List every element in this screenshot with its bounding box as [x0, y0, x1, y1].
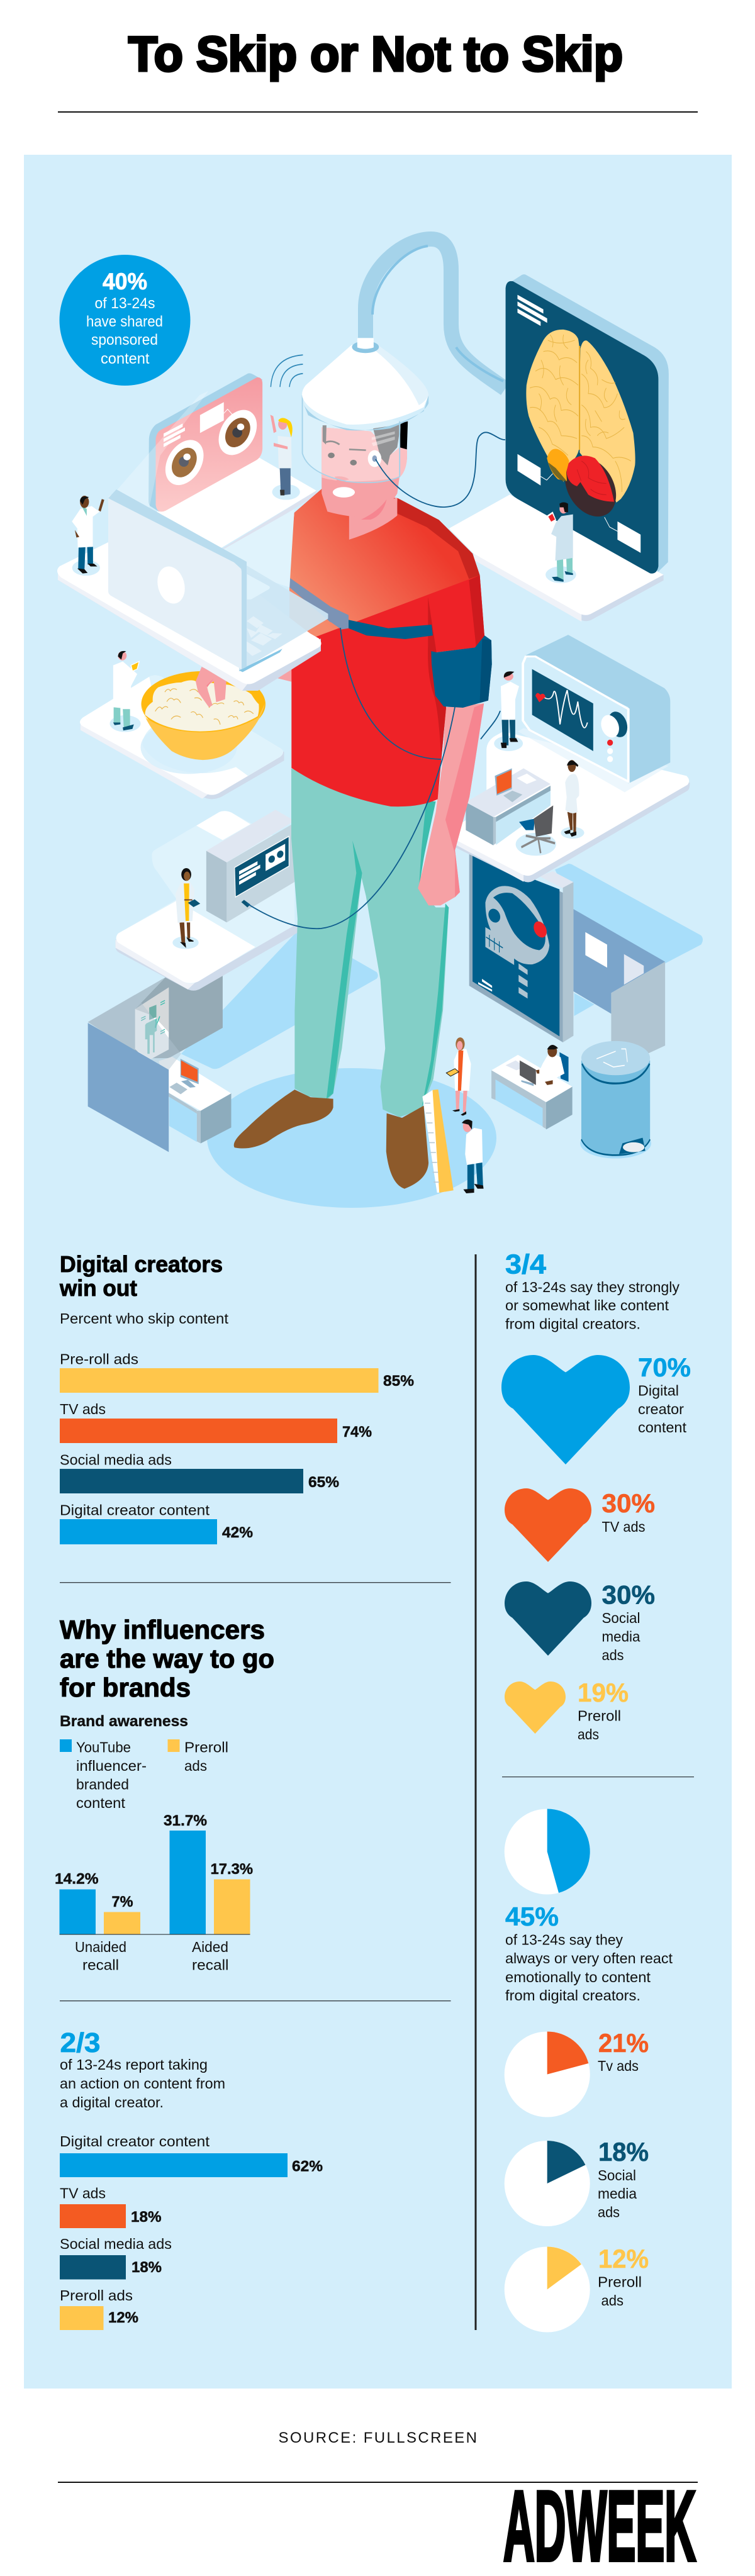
illustration: back room wall and partition [573, 909, 665, 1056]
signal waves [271, 355, 303, 387]
bar: digital creator content: Digital creator content [60, 2133, 210, 2149]
brain [526, 330, 635, 529]
stat: two thirds took action: a digital creator. [60, 2094, 164, 2110]
heading: Digital creators [60, 1251, 223, 1277]
pie chart: 45 percent react emotionally: of 13-24s say they [505, 1931, 623, 1948]
illustration: platform with scanner machine [116, 810, 298, 991]
legend: youtube and preroll: YouTube [76, 1739, 131, 1755]
callout: 40 percent shared sponsored content: 40% [103, 269, 147, 294]
illustration: man's head and face [302, 338, 428, 540]
pie chart: preroll ads 12 percent: ads [601, 2292, 624, 2309]
heart chart: tv ads 30 percent: TV ads [601, 1519, 646, 1535]
heart chart: digital creator content 70 percent [501, 1352, 691, 1464]
bar: digital creator content: 42% [222, 1524, 253, 1541]
illustration: brain scan screen [449, 274, 669, 622]
bar: social media ads: Social media ads [60, 2236, 172, 2252]
heading: why influencers [60, 1615, 274, 1702]
illustration: desk with seated doctor [491, 1045, 573, 1130]
bar: social media ads [60, 1452, 339, 1493]
illustration: floor shapes [181, 864, 703, 1208]
helmet glass visor [303, 395, 400, 482]
bar: tv ads: TV ads [60, 1401, 106, 1417]
pie chart: 45 percent react emotionally: from digital creators. [505, 1987, 640, 2004]
bar: preroll ads: Preroll ads [60, 2287, 133, 2304]
doctor: blonde woman waving [271, 415, 300, 500]
pie chart: tv ads 21 percent [505, 2028, 649, 2117]
stat: three quarters like creator content: or somewhat like content [505, 1297, 669, 1313]
illustration: heart monitor machine [494, 635, 670, 783]
chart: actions taken [60, 2133, 323, 2330]
doctor: woman by the chair [561, 760, 584, 839]
office chair [516, 805, 556, 856]
illustration: right platform with desk [450, 728, 690, 883]
glowing area beside chest [222, 509, 294, 588]
left shoe [234, 1090, 333, 1149]
chart: brand recall grouped bars: 17.3% [210, 1861, 253, 1878]
callout: 40 percent shared sponsored content [59, 255, 190, 386]
pie chart: tv ads 21 percent: Tv ads [598, 2058, 639, 2074]
chart: brand recall grouped bars: recall [192, 1956, 229, 1973]
heart chart: social media ads 30 percent: 30% [601, 1580, 655, 1609]
legend: youtube and preroll: branded [76, 1776, 129, 1793]
title: To Skip or Not to Skip [128, 26, 623, 82]
bar: pre-roll ads: Pre-roll ads [60, 1351, 138, 1368]
bar: digital creator content: Digital creator content [60, 1502, 210, 1519]
pie chart: tv ads 21 percent: 21% [598, 2028, 649, 2058]
legend: youtube and preroll [60, 1739, 228, 1811]
illustration: man's arm and hand [418, 703, 484, 905]
bar: social media ads: 65% [308, 1474, 339, 1491]
heading [59, 1251, 223, 1301]
bar: social media ads: Social media ads [60, 1452, 172, 1468]
x-ray figure on door [141, 1000, 165, 1054]
illustration: left room with desk [88, 976, 231, 1152]
heart chart: digital creator content 70 percent: content [638, 1419, 687, 1436]
illustration: bowl platform [80, 651, 284, 799]
callout: 40 percent shared sponsored content: sponsored [91, 332, 158, 348]
stat: three quarters like creator content [505, 1249, 680, 1332]
pie chart: preroll ads 12 percent [505, 2244, 649, 2333]
doctor: man with clipboard [109, 651, 140, 732]
pie chart: 45 percent react emotionally: emotionally to content [505, 1969, 651, 1985]
doctor: woman with tablet [172, 868, 200, 949]
heart chart: preroll ads 19 percent [505, 1678, 629, 1742]
bar: digital creator content: 62% [292, 2158, 323, 2175]
subheading: brand awareness: Brand awareness [60, 1713, 188, 1730]
pie chart: 45 percent react emotionally [505, 1809, 673, 2004]
heading: win out [59, 1275, 137, 1301]
bar: tv ads [60, 2185, 161, 2228]
heart chart: social media ads 30 percent: ads [601, 1647, 624, 1663]
helmet cone and pipe connector [302, 338, 428, 430]
bar: preroll ads: 12% [108, 2309, 138, 2326]
illustration: man's trousers and shoes [234, 768, 449, 1189]
bar: digital creator content [60, 1502, 253, 1544]
pie chart: social media ads 18 percent: Social [598, 2167, 636, 2183]
stat: two thirds took action: 2/3 [60, 2027, 101, 2058]
illustration: pipe from hat to brain screen [366, 239, 505, 389]
chart: brand recall grouped bars: Aided [192, 1939, 228, 1955]
stat: three quarters like creator content: 3/4 [505, 1249, 547, 1280]
chart: brand recall grouped bars: 7% [112, 1893, 133, 1910]
chart: brand recall grouped bars: recall [82, 1956, 119, 1973]
heart chart: tv ads 30 percent: 30% [601, 1488, 655, 1518]
bar: tv ads: 18% [131, 2209, 161, 2226]
illustration: bowl of popcorn [141, 667, 266, 760]
pie chart: social media ads 18 percent: media [598, 2185, 637, 2202]
subheading: Percent who skip content [60, 1310, 229, 1327]
illustration: sensor cables [247, 432, 505, 928]
bar: tv ads: TV ads [60, 2185, 106, 2202]
bar: social media ads [60, 2236, 172, 2280]
stat: three quarters like creator content: from digital creators. [505, 1316, 640, 1332]
bar: pre-roll ads [60, 1351, 414, 1393]
pie chart: 45 percent react emotionally: 45% [505, 1902, 559, 1931]
source line: SOURCE: FULLSCREEN [278, 2429, 477, 2446]
heart chart: digital creator content 70 percent: 70% [638, 1352, 691, 1382]
legend: youtube and preroll: ads [184, 1758, 207, 1774]
chart: digital creators win out [59, 1251, 414, 1544]
stat: two thirds took action [60, 2027, 225, 2110]
heart chart: tv ads 30 percent [505, 1488, 655, 1562]
bar: preroll ads [60, 2287, 138, 2330]
chart: brand recall grouped bars [55, 1812, 253, 1973]
doctor: man looking at ruler [459, 1120, 490, 1196]
pie chart: 45 percent react emotionally: always or very often react [505, 1950, 673, 1966]
heart chart: digital creator content 70 percent: creator [638, 1401, 684, 1417]
chart: brand recall grouped bars: Unaided [75, 1939, 126, 1955]
stat: three quarters like creator content: of 13-24s say they strongly [505, 1279, 680, 1295]
legend: youtube and preroll: influencer- [76, 1758, 147, 1774]
pie chart: social media ads 18 percent [505, 2137, 649, 2226]
illustration: man's torso and red shirt [275, 489, 492, 806]
desk [466, 768, 551, 845]
callout: 40 percent shared sponsored content: content [101, 350, 150, 367]
bar: social media ads: 18% [131, 2259, 162, 2276]
heart chart: preroll ads 19 percent: 19% [578, 1678, 629, 1707]
callout: 40 percent shared sponsored content: of 13-24s [94, 295, 155, 312]
illustration: recycling bin [580, 1041, 651, 1159]
illustration: eye scan screen and platform [115, 355, 316, 552]
doctor: man with crossed arms [494, 672, 523, 751]
heart chart: social media ads 30 percent: media [601, 1628, 640, 1644]
legend: youtube and preroll: content [76, 1795, 126, 1811]
stat: two thirds took action: an action on content from [60, 2075, 225, 2092]
pie chart: social media ads 18 percent: 18% [598, 2137, 649, 2166]
chart: brand recall grouped bars: 31.7% [164, 1812, 207, 1829]
heart chart: preroll ads 19 percent: ads [578, 1726, 599, 1742]
pie chart: preroll ads 12 percent: Preroll [598, 2273, 642, 2290]
heading: why influencers: are the way to go [60, 1644, 274, 1673]
right shoe [386, 1106, 428, 1189]
doctor: man with red chart [545, 502, 576, 583]
hand reaching into bowl [196, 667, 226, 707]
stat: two thirds took action: of 13-24s report taking [60, 2056, 208, 2073]
bar: tv ads [60, 1401, 372, 1443]
blood pressure cuff [431, 635, 492, 708]
bar: pre-roll ads: 85% [383, 1373, 414, 1390]
pie chart: social media ads 18 percent: ads [598, 2204, 620, 2221]
illustration: ruler beside foot [422, 1090, 454, 1193]
heart chart: digital creator content 70 percent: Digital [638, 1383, 679, 1399]
pie chart: preroll ads 12 percent: 12% [598, 2244, 649, 2273]
bar: tv ads: 74% [342, 1424, 372, 1441]
legend: youtube and preroll: Preroll [184, 1739, 228, 1755]
heading: why influencers: Why influencers [60, 1615, 265, 1644]
chart: brand recall grouped bars: 14.2% [55, 1871, 98, 1887]
heart chart: social media ads 30 percent [505, 1580, 655, 1663]
doctor: woman with yellow tablet [446, 1037, 471, 1116]
illustration: skull x-ray panel [469, 853, 573, 1042]
heart chart: preroll ads 19 percent: Preroll [578, 1707, 621, 1724]
illustration: laptop on platform [57, 489, 328, 691]
heading: why influencers: for brands [60, 1673, 191, 1702]
bar: digital creator content [60, 2133, 323, 2177]
callout: 40 percent shared sponsored content: have shared [86, 313, 163, 330]
heart chart: social media ads 30 percent: Social [601, 1610, 640, 1626]
doctor: man waving beside laptop [72, 496, 104, 576]
